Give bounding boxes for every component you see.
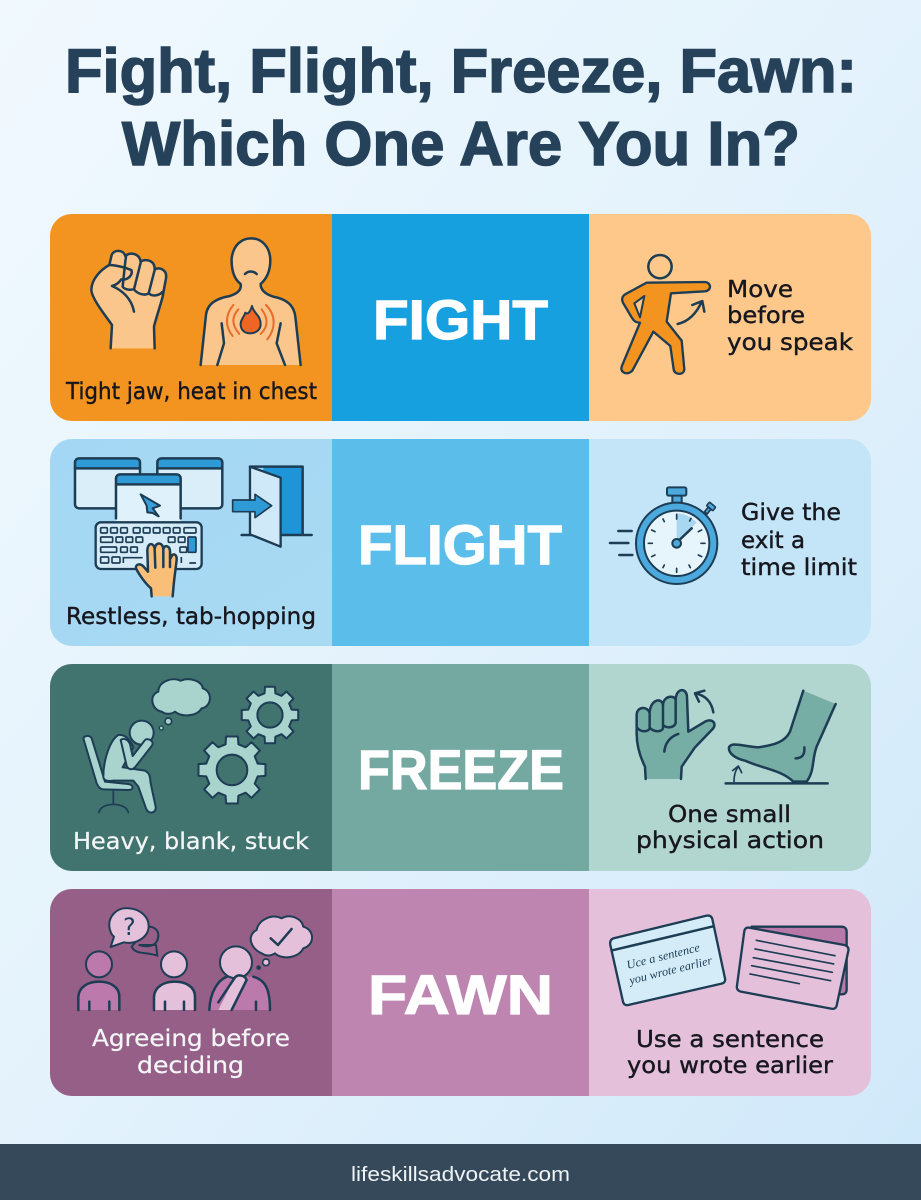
fawn action text [627, 1027, 834, 1079]
flight action text: exit a [741, 528, 805, 554]
freeze action text: One small [668, 802, 791, 828]
fight action panel [589, 214, 871, 421]
icon: browser tabs and keyboard [75, 458, 222, 596]
icon: card with written sentence: you wrote earlier [627, 953, 714, 987]
title [65, 37, 857, 179]
fawn label [332, 889, 589, 1096]
flight action text: time limit [741, 555, 857, 581]
fight action text: you speak [727, 330, 854, 356]
freeze sensation caption: Heavy, blank, stuck [73, 829, 310, 855]
icon: two gears [198, 687, 298, 803]
flight action text [741, 500, 857, 581]
icon: slumped person on chair with thought cloud [83, 679, 210, 813]
footer [0, 1144, 921, 1200]
panel: fight row [50, 214, 871, 421]
fight action text: Move [727, 277, 793, 303]
icon: person with fire in chest [201, 238, 301, 365]
icon: exit door with arrow [233, 467, 312, 547]
flight sensation caption: Restless, tab-hopping [66, 604, 316, 630]
flight action text: Give the [741, 500, 841, 526]
title: Fight, Flight, Freeze, Fawn: [65, 37, 857, 106]
fawn sensation caption: Agreeing before [92, 1026, 290, 1052]
fight label: FIGHT [373, 288, 548, 351]
icon: card with written sentence: Uce a sentence [625, 940, 702, 972]
icon: hand moving thumb [637, 690, 714, 779]
icon: clenched fist [91, 251, 166, 348]
icon: stack of note cards [737, 927, 848, 1009]
icon: moving figure [621, 255, 710, 374]
icon: foot lifting toes [726, 691, 836, 783]
freeze label [332, 664, 589, 871]
panel: freeze row [50, 664, 871, 871]
title: Which One Are You In? [122, 110, 800, 179]
fawn label: FAWN [368, 963, 553, 1026]
freeze label: FREEZE [358, 738, 564, 801]
fight sensations panel [50, 214, 332, 421]
freeze sensations panel [50, 664, 332, 871]
fight sensation caption: Tight jaw, heat in chest [65, 379, 317, 405]
footer: lifeskillsadvocate.com [351, 1164, 570, 1186]
fawn action text: you wrote earlier [627, 1053, 834, 1079]
panel: fawn row [50, 889, 871, 1096]
fawn action panel [589, 889, 871, 1096]
fawn action text: Use a sentence [636, 1027, 824, 1053]
flight action panel [589, 439, 871, 646]
icon: stopwatch [610, 487, 717, 584]
freeze action panel [589, 664, 871, 871]
icon: two people with speech bubbles [78, 908, 195, 1010]
freeze action text: physical action [636, 828, 824, 854]
fawn sensation caption [92, 1026, 290, 1079]
icon: person thinking with check cloud [209, 916, 312, 1010]
fight action text [727, 277, 854, 356]
panel: flight row [50, 439, 871, 646]
freeze action text [636, 802, 824, 854]
fawn sensations panel [50, 889, 332, 1096]
icon: two people with speech bubbles: ? [123, 913, 136, 941]
fight action text: before [727, 303, 805, 329]
icon: card with written sentence [610, 916, 725, 1005]
flight sensations panel [50, 439, 332, 646]
flight label [332, 439, 589, 646]
fight label [332, 214, 589, 421]
fawn sensation caption: deciding [137, 1053, 244, 1079]
flight label: FLIGHT [358, 513, 562, 576]
